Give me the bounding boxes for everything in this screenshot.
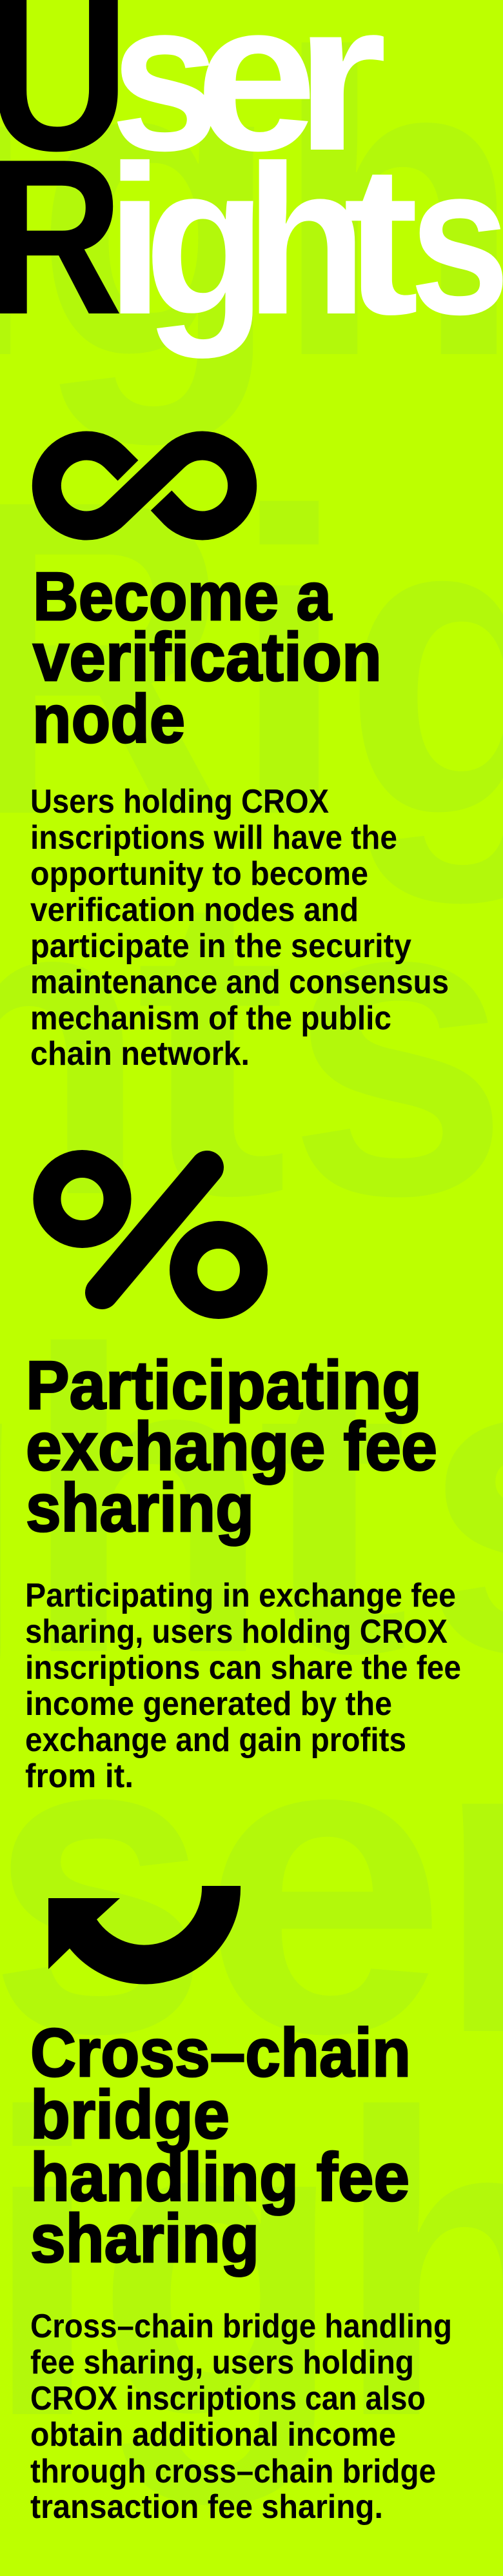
body text: verification node: maintenance and consensus	[30, 964, 449, 1001]
body text: cross-chain fee sharing: obtain additional income	[30, 2416, 396, 2453]
body text: verification node: verification nodes and	[30, 891, 359, 929]
body text: exchange fee sharing	[25, 1577, 461, 1795]
icon: percent	[47, 1164, 254, 1305]
ghost word: hts: t	[135, 804, 288, 1285]
heading: participating exchange fee sharing: sharing	[26, 1470, 254, 1546]
body text: exchange fee sharing: from it.	[25, 1758, 133, 1795]
body text: verification node	[30, 783, 449, 1073]
ghost word: igh lower: g	[96, 2025, 343, 2508]
body text: verification node: mechanism of the public	[30, 1000, 391, 1037]
title word: Rights: h	[245, 121, 367, 359]
ghost word: hts	[0, 804, 503, 1285]
panel: participating exchange fee sharing	[25, 1164, 461, 1795]
body text: verification node: inscriptions will have the	[30, 819, 397, 857]
body text: cross-chain fee sharing: through cross–chain bridge	[30, 2453, 436, 2490]
heading: cross-chain bridge handling fee sharing: Cross–chain	[30, 2015, 411, 2091]
heading: cross-chain bridge handling fee sharing: sharing	[30, 2201, 259, 2277]
heading: participating exchange fee sharing	[26, 1347, 437, 1546]
heading: cross-chain bridge handling fee sharing	[30, 2015, 411, 2277]
title	[0, 0, 503, 361]
icon: curved arrow	[48, 1886, 241, 1985]
heading: participating exchange fee sharing: Participating	[26, 1347, 422, 1423]
body text: verification node: opportunity to become	[30, 855, 368, 893]
ghost word: Rig	[0, 407, 503, 908]
heading: cross-chain bridge handling fee sharing: handling fee	[30, 2139, 409, 2215]
icon: infinity	[46, 446, 242, 526]
ghost word: ghts: h	[22, 1262, 271, 1743]
body text: cross-chain fee sharing: CROX inscriptions can also	[30, 2380, 426, 2417]
ghost word: hts: s	[288, 805, 503, 1285]
panel: cross-chain bridge handling fee sharing	[30, 1886, 452, 2526]
title word: Rights: g	[144, 121, 266, 360]
body text: verification node: chain network.	[30, 1035, 250, 1073]
ghost word: ser	[0, 1642, 503, 2123]
ghost word: ghts: t	[257, 1262, 410, 1743]
body text: exchange fee sharing: inscriptions can share the fee	[25, 1649, 461, 1687]
title word: Rights: t	[343, 122, 419, 359]
body text: cross-chain fee sharing: fee sharing, users holding	[30, 2344, 414, 2381]
ghost word: Rig: i	[230, 424, 349, 904]
heading: participating exchange fee sharing: exchange fee	[26, 1409, 437, 1485]
body text: exchange fee sharing: income generated by the	[25, 1685, 392, 1723]
body text: cross-chain fee sharing: transaction fee sharing.	[30, 2488, 383, 2526]
title word: User	[0, 0, 387, 197]
body text: exchange fee sharing: exchange and gain profits	[25, 1721, 406, 1759]
heading: become a verification node	[32, 559, 382, 757]
title word: Rights	[0, 113, 503, 361]
ghost word: igh	[0, 0, 503, 448]
title word: Rights: i	[106, 121, 164, 359]
body text: exchange fee sharing: Participating in exchange fee	[25, 1577, 456, 1614]
heading: become a verification node: verification	[33, 619, 382, 695]
heading: become a verification node: node	[32, 681, 185, 757]
body text: verification node: participate in the security	[30, 927, 411, 965]
body text: exchange fee sharing: sharing, users holding CROX	[25, 1613, 448, 1650]
ghost word: ser: e	[201, 1642, 447, 2123]
ghost word: igh lower	[0, 2025, 503, 2508]
heading: become a verification node: Become a	[33, 559, 332, 635]
body text: cross-chain fee sharing	[30, 2308, 452, 2526]
body text: cross-chain fee sharing: Cross–chain bridge handling	[30, 2308, 452, 2345]
ghost word: ghts	[0, 1262, 503, 1745]
panel: become a verification node	[30, 446, 449, 1073]
heading: cross-chain bridge handling fee sharing: bridge	[30, 2077, 230, 2153]
body text: verification node: Users holding CROX	[30, 783, 329, 820]
